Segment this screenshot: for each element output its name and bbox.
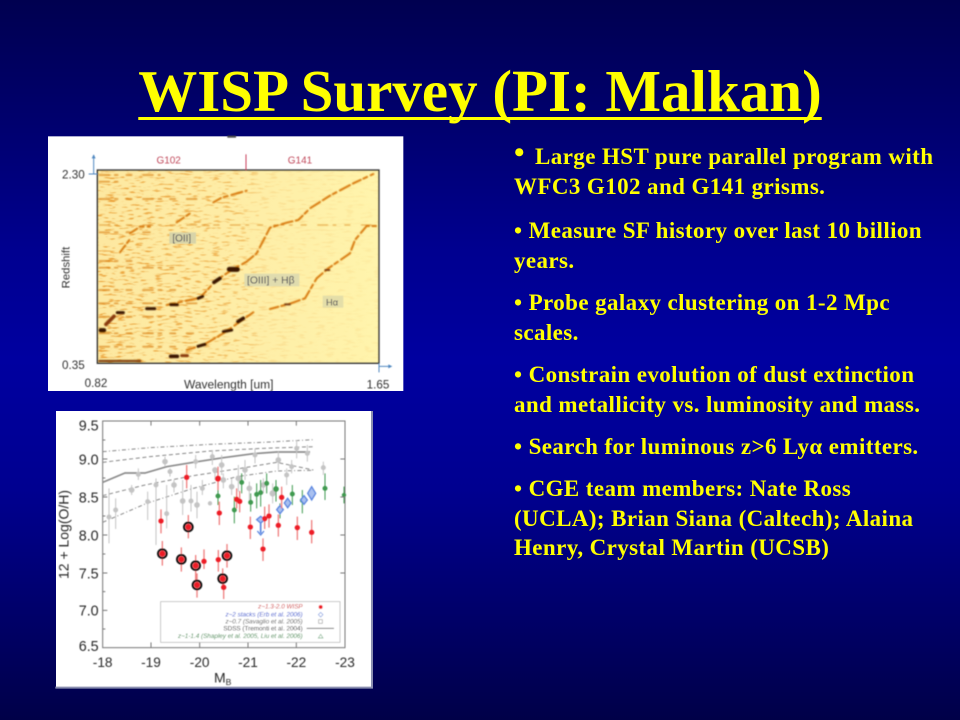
bullet: clustering: • Probe galaxy clustering on 1-2 Mpc <box>514 290 890 315</box>
red data points <box>161 465 312 599</box>
bullet: clustering: scales. <box>514 320 579 345</box>
chart: metallicity vs absolute magnitude: -22 <box>286 655 306 670</box>
legend: z~1-1.4 (Shapley et al. 2005, Liu et al. 2006) <box>177 633 303 640</box>
chart: metallicity vs absolute magnitude: -19 <box>141 655 161 670</box>
bullet: SF history: • Measure SF history over last 10 billion <box>514 218 922 243</box>
chart: redshift vs wavelength spectral image: 2.30 <box>62 169 85 182</box>
bullet: dust and metallicity <box>514 362 920 417</box>
bullet: team: (UCLA); Brian Siana (Caltech); Alaina <box>514 506 913 531</box>
chart: redshift vs wavelength spectral image: Redshift <box>60 246 72 288</box>
chart: redshift vs wavelength spectral image: [OIII] + Hβ <box>247 275 295 286</box>
bullet: dust and metallicity: • Constrain evolution of dust extinction <box>514 362 914 387</box>
blue data points <box>257 487 316 535</box>
bullet: HST program: WFC3 G102 and G141 grisms. <box>514 174 825 199</box>
chart: redshift vs wavelength spectral image: G102 <box>156 156 181 167</box>
chart: metallicity vs absolute magnitude: 8.5 <box>79 490 99 506</box>
chart: redshift vs wavelength spectral image: G141 <box>288 156 313 167</box>
chart: redshift vs wavelength spectral image: 0.82 <box>85 377 107 390</box>
chart: metallicity vs absolute magnitude: 6.5 <box>79 639 99 655</box>
chart: metallicity vs absolute magnitude: 12 + Log(O/H) <box>55 490 71 579</box>
green data points <box>216 473 346 523</box>
bullet: HST program: • Large HST pure parallel program with <box>514 136 933 169</box>
legend: z~0.7 (Savaglio et al. 2005) <box>224 618 303 625</box>
chart: metallicity vs absolute magnitude: M <box>214 669 226 685</box>
legend: SDSS (Tremonti et al. 2004) <box>223 626 303 633</box>
chart: redshift vs wavelength spectral image: Hα <box>326 297 339 307</box>
chart: redshift vs wavelength spectral image: [OII] <box>172 234 191 245</box>
chart: metallicity vs absolute magnitude: -20 <box>190 655 210 670</box>
chart: metallicity vs absolute magnitude: 7.0 <box>79 604 99 620</box>
chart: metallicity vs absolute magnitude: 9.0 <box>79 452 99 468</box>
title: WISP Survey (PI: Malkan) <box>138 58 822 124</box>
chart: metallicity vs absolute magnitude: B <box>226 677 232 687</box>
bullet: HST program <box>514 136 933 199</box>
chart: redshift vs wavelength spectral image: Wavelength [um] <box>184 377 273 391</box>
chart: metallicity vs absolute magnitude: -21 <box>238 655 258 670</box>
chart: metallicity vs absolute magnitude: 8.0 <box>79 528 99 544</box>
bullet: SF history: years. <box>514 248 575 273</box>
chart: redshift vs wavelength spectral image: 0.35 <box>62 359 85 372</box>
axis ticks <box>103 421 345 648</box>
chart: metallicity vs absolute magnitude: -18 <box>93 655 113 670</box>
bullet: team: Henry, Crystal Martin (UCSB) <box>514 535 829 560</box>
chart: metallicity vs absolute magnitude: -23 <box>335 655 355 670</box>
chart: metallicity vs absolute magnitude: 9.5 <box>79 419 99 435</box>
chart: redshift vs wavelength spectral image <box>48 135 404 392</box>
chart: metallicity vs absolute magnitude: 7.5 <box>79 566 99 582</box>
bullet: emitters: • Search for luminous z>6 Lyα emitters. <box>514 434 919 459</box>
legend: z~1.3-2.0 WISP <box>257 603 303 610</box>
bullet: team: • CGE team members: Nate Ross <box>514 476 851 501</box>
grey data points <box>107 440 325 545</box>
legend <box>161 602 340 642</box>
bullet: clustering <box>514 290 890 345</box>
legend: z~2 stacks (Erb et al. 2006) <box>224 611 303 618</box>
bullet: SF history <box>514 218 922 273</box>
chart: redshift vs wavelength spectral image: 1.65 <box>367 379 389 392</box>
bullet: team <box>514 476 913 560</box>
bullet: dust and metallicity: and metallicity vs. luminosity and mass. <box>514 392 920 417</box>
